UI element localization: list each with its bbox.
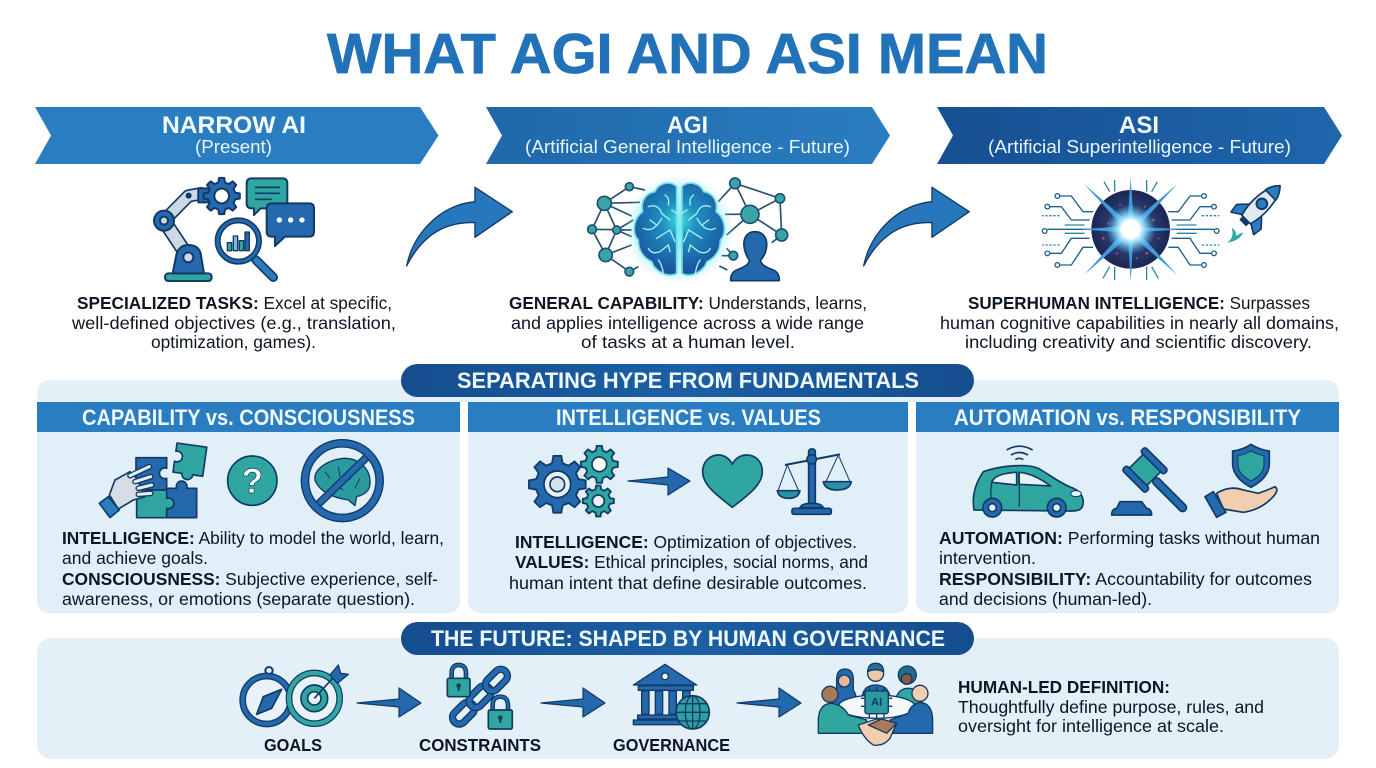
text: intelligence and values definitions xyxy=(509,532,868,593)
text: superhuman intelligence: including creativity and scientific discovery. xyxy=(965,332,1312,352)
text: human-led definition xyxy=(958,677,1264,736)
text: intelligence and values definitions: INTELLIGENCE: Optimization of objectives. xyxy=(515,532,857,552)
text: automation and responsibility definitions: intervention. xyxy=(939,548,1036,568)
text: superhuman intelligence: SUPERHUMAN INTELLIGENCE: Surpasses xyxy=(968,293,1310,313)
text: human-led definition: Thoughtfully define purpose, rules, and xyxy=(958,697,1264,717)
icon: question mark: ? xyxy=(242,462,263,501)
label: goals: GOALS xyxy=(264,735,322,755)
text: automation and responsibility definitions: RESPONSIBILITY: Accountability for outcomes xyxy=(939,569,1312,589)
banner: Narrow AI: NARROW AI xyxy=(162,112,306,139)
arrow: Narrow AI to AGI xyxy=(407,187,512,266)
heading pill: the future: THE FUTURE: SHAPED BY HUMAN GOVERNANCE xyxy=(431,626,945,651)
icon: people around AI table with handshake xyxy=(818,663,933,745)
banner: AGI xyxy=(486,107,890,164)
text: intelligence and consciousness definitions: INTELLIGENCE: Ability to model the world, learn, xyxy=(62,528,444,548)
icon: connected car xyxy=(973,446,1083,517)
text: automation and responsibility definitions: and decisions (human-led). xyxy=(939,589,1152,609)
icon: gavel xyxy=(1112,447,1183,515)
icon: superintelligence star with circuits and rocket xyxy=(1042,173,1292,282)
text: specialized tasks: SPECIALIZED TASKS: Excel at specific, xyxy=(77,293,392,313)
icon: hand holding shield xyxy=(1205,444,1277,517)
icon: puzzle and robot hand xyxy=(99,443,207,518)
panel: intelligence vs values: INTELLIGENCE vs. VALUES xyxy=(556,405,821,430)
text: intelligence and consciousness definitions: and achieve goals. xyxy=(62,548,208,568)
icon: robot arm, chat bubbles and magnifier xyxy=(154,178,314,281)
icon: gears xyxy=(529,446,618,517)
text: automation and responsibility definitions xyxy=(939,528,1320,609)
icon: balance scales xyxy=(777,449,851,514)
banner: ASI: (Artificial Superintelligence - Future) xyxy=(988,137,1291,157)
arrow: governance to people xyxy=(737,688,801,717)
text: intelligence and consciousness definitions: CONSCIOUSNESS: Subjective experience, self- xyxy=(62,569,438,589)
text: intelligence and values definitions: human intent that define desirable outcomes. xyxy=(509,573,867,593)
icon: question mark xyxy=(228,456,277,505)
text: human-led definition: oversight for intelligence at scale. xyxy=(958,716,1224,736)
arrow: goals to constraints xyxy=(357,688,421,717)
panel: intelligence vs values xyxy=(468,402,908,613)
text: intelligence and values definitions: VALUES: Ethical principles, social norms, and xyxy=(515,552,868,572)
icon: brain crossed out xyxy=(305,443,380,518)
icon: compass and target xyxy=(243,665,348,724)
icon: chain and padlocks xyxy=(447,665,512,729)
label: constraints: CONSTRAINTS xyxy=(419,735,541,755)
text: general capability: of tasks at a human level. xyxy=(581,332,795,352)
panel: automation vs responsibility: AUTOMATION vs. RESPONSIBILITY xyxy=(954,405,1301,430)
text: human-led definition: HUMAN-LED DEFINITION: xyxy=(958,677,1170,697)
banner: ASI xyxy=(937,107,1342,164)
text: specialized tasks: optimization, games). xyxy=(151,332,316,352)
text: general capability: GENERAL CAPABILITY: Understands, learns, xyxy=(509,293,867,313)
banner: Narrow AI: (Present) xyxy=(195,137,272,157)
text: superhuman intelligence: human cognitive capabilities in nearly all domains, xyxy=(940,313,1339,333)
icon: glowing brain network with person xyxy=(588,174,788,284)
banner: AGI: (Artificial General Intelligence - Future) xyxy=(525,137,850,157)
icon: government building and globe xyxy=(633,664,709,729)
section: separating hype from fundamentals xyxy=(37,364,1339,613)
text: intelligence and consciousness definitions: awareness, or emotions (separate question). xyxy=(62,589,415,609)
section: the future shaped by human governance xyxy=(37,622,1339,759)
arrow: constraints to governance xyxy=(541,688,605,717)
heading pill: separating hype from fundamentals: SEPARATING HYPE FROM FUNDAMENTALS xyxy=(457,368,919,393)
heading pill: separating hype from fundamentals xyxy=(401,364,974,397)
text: specialized tasks: well-defined objectives (e.g., translation, xyxy=(71,313,396,333)
icon: heart xyxy=(703,455,762,507)
title: WHAT AGI AND ASI MEAN xyxy=(327,22,1048,86)
text: automation and responsibility definitions: AUTOMATION: Performing tasks without human xyxy=(939,528,1320,548)
banner: Narrow AI xyxy=(35,107,438,164)
text: specialized tasks xyxy=(71,293,396,352)
panel: capability vs consciousness: CAPABILITY vs. CONSCIOUSNESS xyxy=(82,405,415,430)
icon: people around AI table with handshake: AI xyxy=(871,697,882,709)
banner: AGI: AGI xyxy=(667,112,708,139)
banner: ASI: ASI xyxy=(1119,112,1159,139)
arrow: AGI to ASI xyxy=(864,187,969,266)
arrow: intelligence to values xyxy=(628,468,690,495)
text: general capability: and applies intelligence across a wide range xyxy=(511,313,864,333)
panel: capability vs consciousness xyxy=(37,402,460,613)
panel: automation vs responsibility xyxy=(916,402,1339,613)
text: superhuman intelligence xyxy=(940,293,1339,352)
text: general capability xyxy=(509,293,867,352)
label: governance: GOVERNANCE xyxy=(613,735,730,755)
text: intelligence and consciousness definitions xyxy=(62,528,444,609)
